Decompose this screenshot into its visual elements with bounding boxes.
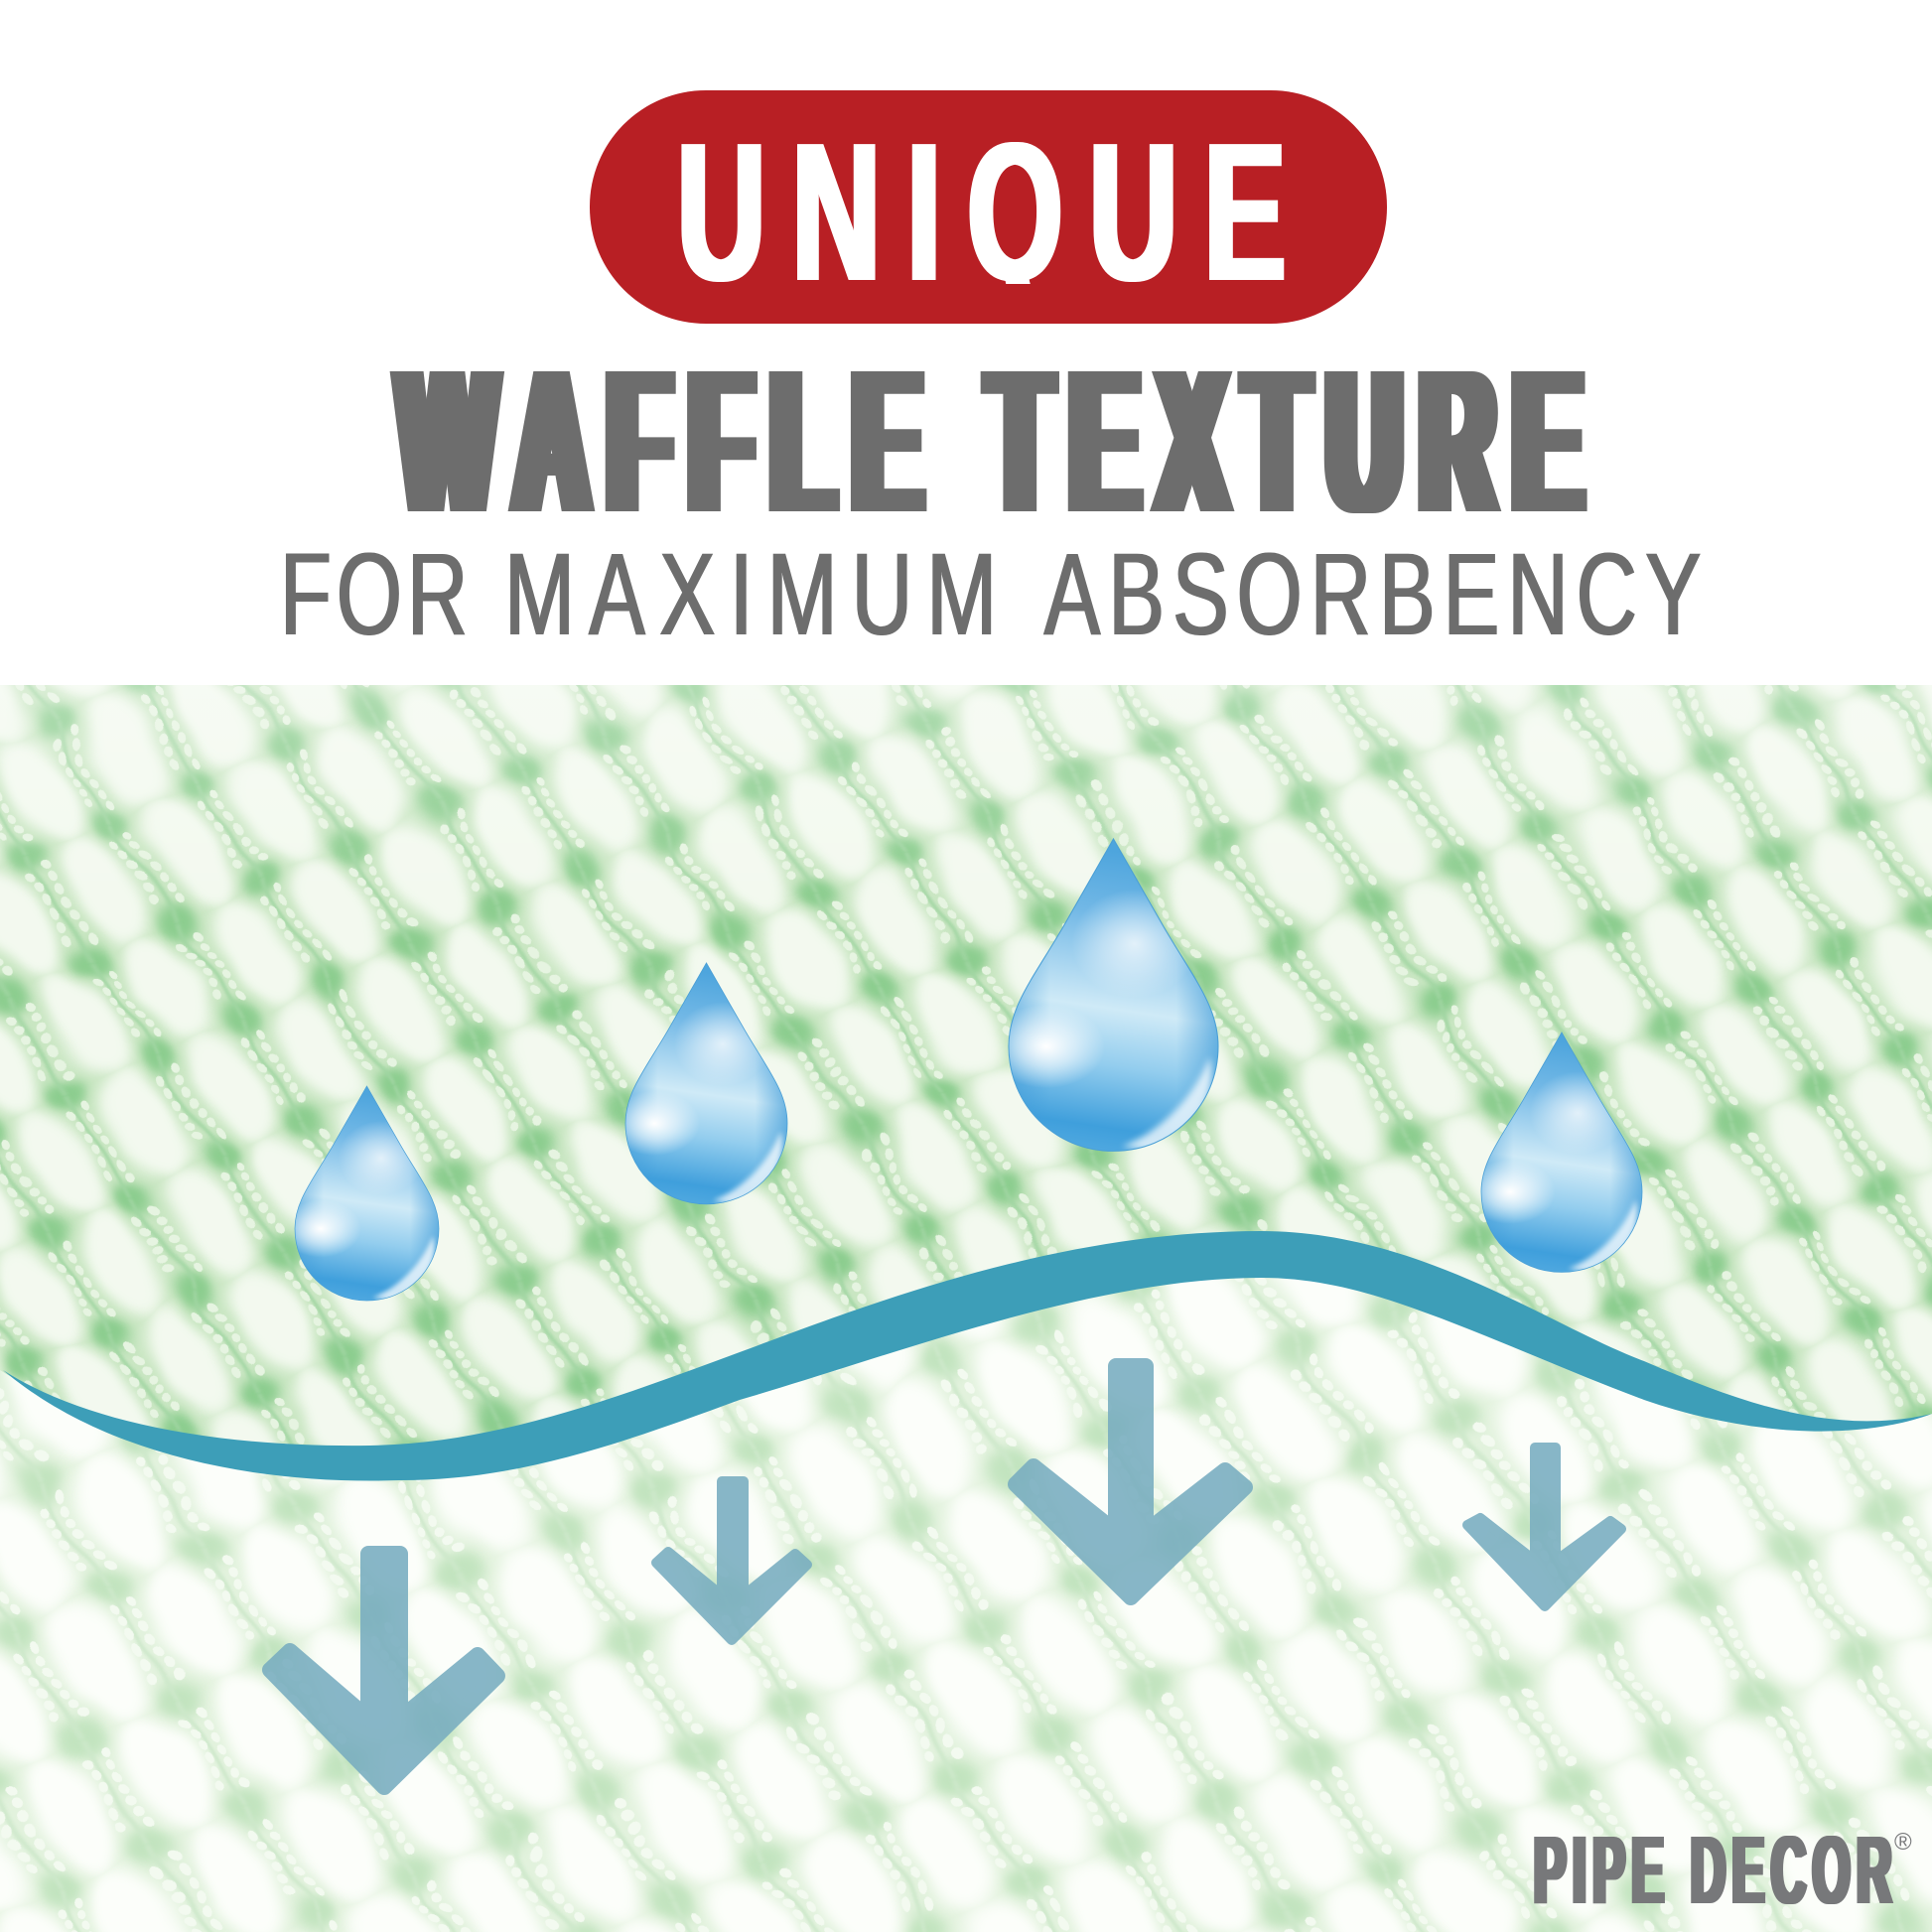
subheading: for maximum absorbency: ABSORBENCY <box>1044 528 1710 659</box>
logo: pipe decor: PIPE DECOR <box>1534 1818 1898 1925</box>
icon: water drop 4 <box>1465 1033 1642 1272</box>
fabric above the wave, greener <box>0 685 1932 1446</box>
panel: waffle fabric photo <box>0 635 1932 1932</box>
fabric below the wave, paler <box>0 1278 1932 1932</box>
arrow: down 2 <box>656 1481 807 1640</box>
badge: unique pill <box>590 90 1387 324</box>
registered mark: ® <box>1894 1829 1912 1856</box>
arrow: down 3 <box>1016 1366 1245 1597</box>
arrow: down 4 <box>1467 1448 1621 1606</box>
subheading: for maximum absorbency: MAXIMUM <box>504 528 1011 659</box>
wave: teal absorbent layer <box>3 1231 1932 1480</box>
arrow: down 1 <box>270 1554 497 1787</box>
icon: water drop 3 <box>988 839 1218 1151</box>
icon: water drop 1 <box>280 1086 439 1301</box>
heading: waffle texture: WAFFLE TEXTURE <box>399 328 1601 555</box>
icon: water drop 2 <box>610 963 787 1204</box>
subheading: for maximum absorbency: FOR <box>280 528 473 659</box>
badge text: UNIQUE <box>677 102 1312 323</box>
